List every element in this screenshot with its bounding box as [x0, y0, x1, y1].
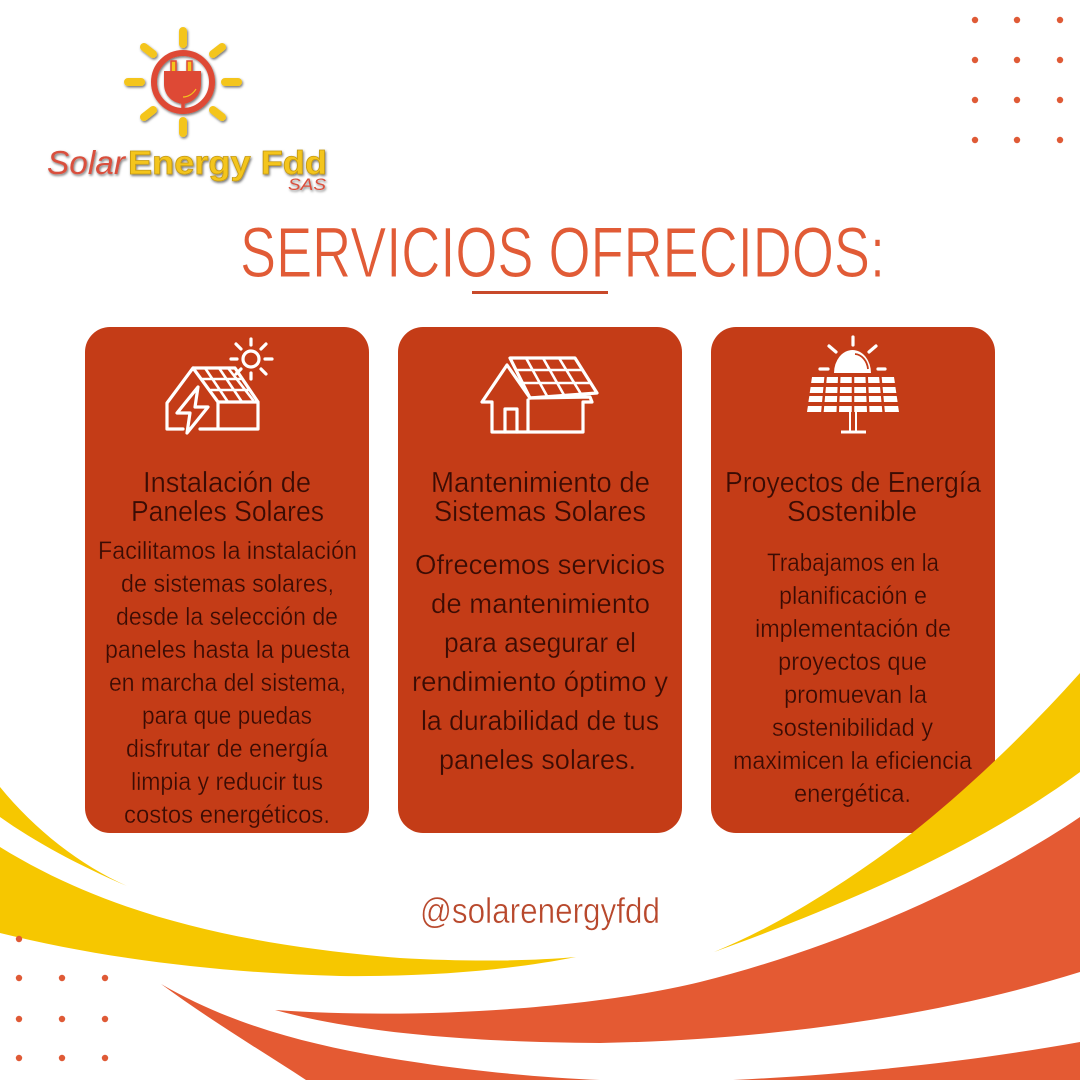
icon: sun with plug	[128, 31, 238, 133]
body text: Trabajamos en la	[767, 549, 939, 577]
body text: maximicen la eficiencia	[733, 747, 972, 775]
panel: Mantenimiento de Sistemas Solares	[398, 327, 682, 833]
swoosh: small yellow left	[0, 787, 127, 886]
heading: Paneles Solares	[131, 496, 324, 528]
logo: Solar Energy Fdd SAS	[47, 31, 327, 194]
logo wordmark: SAS	[288, 175, 327, 194]
swoosh: orange band right	[275, 817, 1080, 1043]
body text: para que puedas	[142, 702, 312, 730]
panel: Proyectos de Energía Sostenible	[711, 327, 995, 833]
body text: de sistemas solares,	[121, 570, 334, 598]
body text	[412, 549, 668, 775]
body text: promuevan la	[784, 681, 927, 709]
swoosh: orange lower left	[161, 984, 600, 1080]
heading	[131, 467, 324, 528]
body text: de mantenimiento	[431, 588, 650, 619]
icon: house with roof panels	[482, 358, 597, 432]
body text: rendimiento óptimo y	[412, 666, 668, 697]
body text: para asegurar el	[444, 627, 636, 658]
heading: Instalación de	[143, 467, 311, 499]
heading	[725, 467, 982, 528]
heading: Sostenible	[787, 496, 917, 528]
heading	[431, 467, 650, 528]
swoosh: large yellow left	[0, 847, 576, 976]
body text: costos energéticos.	[124, 801, 330, 829]
body text	[98, 537, 357, 829]
dot grid: bottom left	[16, 936, 108, 1061]
body text: sostenibilidad y	[772, 714, 933, 742]
body text: desde la selección de	[116, 603, 338, 631]
icon: sun over solar panel	[807, 337, 899, 432]
title underline	[472, 291, 608, 294]
body text: en marcha del sistema,	[109, 669, 346, 697]
panel: Instalación de Paneles Solares	[85, 327, 369, 833]
body text	[733, 549, 972, 808]
body text: paneles hasta la puesta	[105, 636, 350, 664]
heading: Proyectos de Energía	[725, 467, 982, 499]
logo wordmark: Solar	[47, 144, 127, 181]
body text: planificación e	[779, 582, 927, 610]
body text: la durabilidad de tus	[421, 705, 659, 736]
logo wordmark	[47, 144, 327, 194]
logo wordmark: Energy Fdd	[128, 144, 327, 181]
body text: proyectos que	[778, 648, 927, 676]
body text: implementación de	[755, 615, 951, 643]
heading: Mantenimiento de	[431, 467, 650, 499]
dot grid: top right	[972, 17, 1063, 143]
title: SERVICIOS OFRECIDOS:	[240, 214, 885, 293]
body text: Facilitamos la instalación	[98, 537, 357, 565]
swoosh: orange lower right	[733, 1042, 1080, 1080]
social handle: @solarenergyfdd	[420, 890, 660, 931]
swoosh: yellow right	[714, 673, 1080, 952]
body text: energética.	[794, 780, 911, 808]
body text: limpia y reducir tus	[131, 768, 323, 796]
body text: paneles solares.	[439, 744, 636, 775]
heading: Sistemas Solares	[434, 496, 646, 528]
icon: house with solar panels, bolt and sun	[167, 339, 272, 433]
body text: disfrutar de energía	[126, 735, 328, 763]
body text: Ofrecemos servicios	[415, 549, 665, 580]
